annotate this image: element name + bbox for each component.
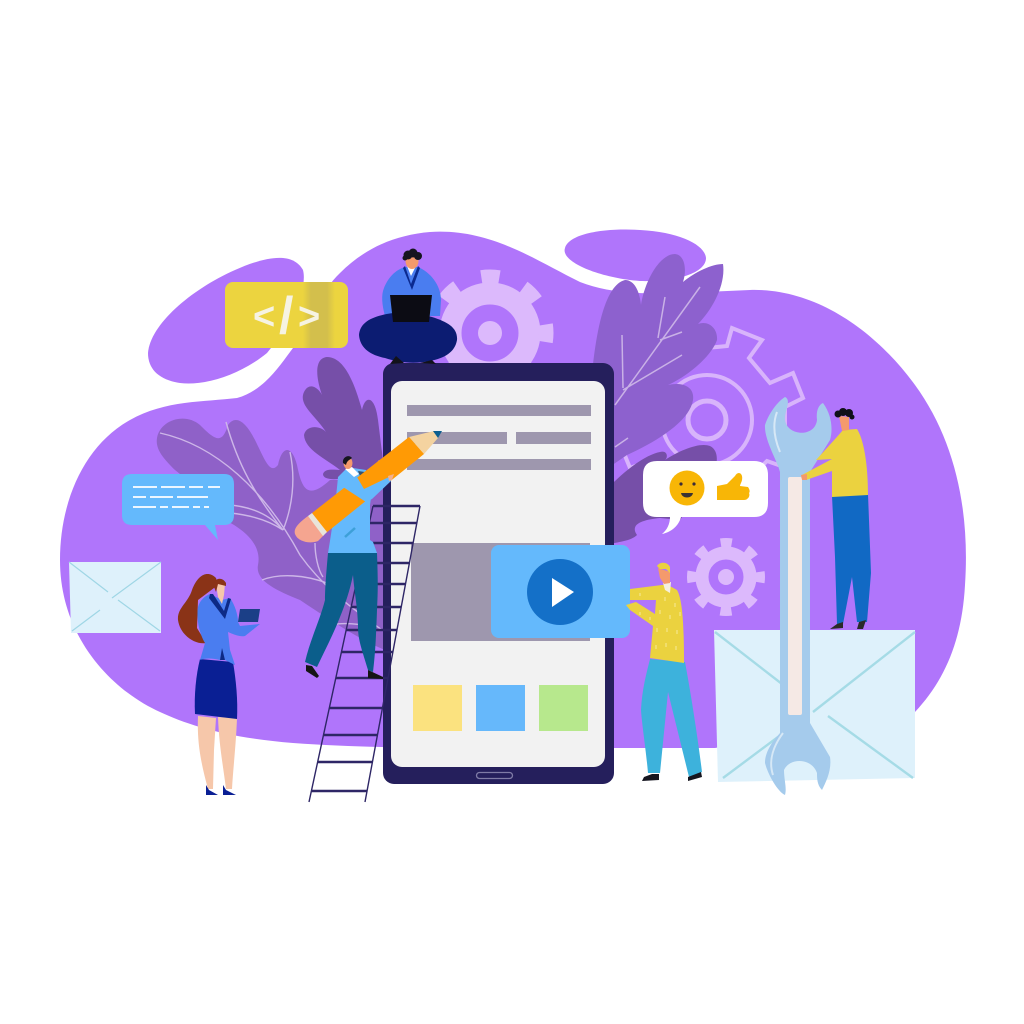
code chip — [225, 282, 348, 348]
envelope: small left — [69, 562, 161, 633]
leaf veins: left — [160, 422, 382, 630]
leaf: right dark lower — [606, 445, 717, 545]
phone screen — [391, 381, 605, 767]
collar — [345, 467, 359, 477]
screen tile: green — [539, 685, 588, 731]
sweater pattern — [640, 593, 680, 650]
leaf: left large — [157, 419, 385, 650]
jacket pocket — [345, 528, 355, 537]
jacket lapel — [403, 266, 420, 290]
head — [344, 457, 352, 469]
trousers — [641, 659, 702, 777]
screen image block — [411, 543, 590, 641]
near hand — [388, 474, 394, 481]
shoes — [390, 356, 436, 364]
collar — [663, 582, 671, 593]
gear: top centre — [434, 277, 546, 389]
skirt — [195, 659, 237, 719]
code chip: > — [298, 296, 320, 338]
leaf: left dark — [303, 357, 386, 485]
leaf: right large — [593, 254, 723, 470]
hair — [657, 563, 670, 573]
head — [839, 416, 849, 431]
trousers — [832, 494, 871, 624]
screen text bars — [407, 405, 591, 470]
shoes — [306, 665, 383, 679]
jacket lapel — [209, 594, 231, 660]
legs — [198, 716, 237, 789]
background blob: top right oval — [565, 230, 706, 281]
screen tile: yellow — [413, 685, 462, 731]
person: man on ladder with pencil — [295, 431, 442, 679]
phone — [383, 363, 614, 784]
head — [216, 584, 225, 604]
screen tile: blue — [476, 685, 525, 731]
wrench — [765, 397, 832, 795]
hair — [834, 408, 854, 420]
gear: small right — [692, 543, 760, 611]
smiley face icon — [670, 470, 704, 506]
hair — [178, 574, 218, 643]
background blob: small upper left — [148, 258, 304, 383]
thumbs up icon — [717, 473, 750, 500]
head — [658, 568, 670, 584]
shoes — [206, 785, 236, 795]
code chip: < — [253, 296, 275, 338]
person: man holding wrench — [801, 408, 871, 629]
arm over pencil — [343, 477, 391, 502]
pencil — [295, 431, 442, 542]
hand — [801, 474, 807, 480]
person: sitting with laptop — [359, 248, 457, 364]
far hand — [374, 460, 383, 472]
trousers — [305, 553, 378, 672]
play video card — [491, 545, 630, 638]
jacket — [382, 267, 441, 316]
code chip: / — [279, 287, 293, 345]
shoes — [642, 772, 702, 781]
person: blond man pushing video card — [626, 563, 702, 781]
head — [406, 253, 418, 269]
gear: large outline — [619, 328, 803, 509]
person: woman with tablet — [178, 574, 260, 795]
hair — [402, 248, 422, 260]
speech bubble: emoji reaction — [643, 461, 768, 534]
wrench highlights — [771, 412, 783, 775]
laptop — [390, 295, 432, 322]
background blob: main purple — [60, 232, 966, 748]
shoes — [830, 620, 866, 629]
phone home button — [476, 772, 512, 778]
sweater — [626, 585, 684, 663]
crossed legs — [359, 313, 457, 363]
jacket — [328, 468, 377, 553]
ladder — [309, 506, 420, 802]
envelope: large — [714, 630, 915, 782]
sweater — [802, 429, 868, 497]
tablet — [238, 609, 260, 622]
speech bubble: blue text — [122, 474, 234, 540]
wrench inner strip — [788, 477, 802, 715]
leaf veins: right — [615, 287, 700, 447]
jacket — [197, 594, 260, 665]
